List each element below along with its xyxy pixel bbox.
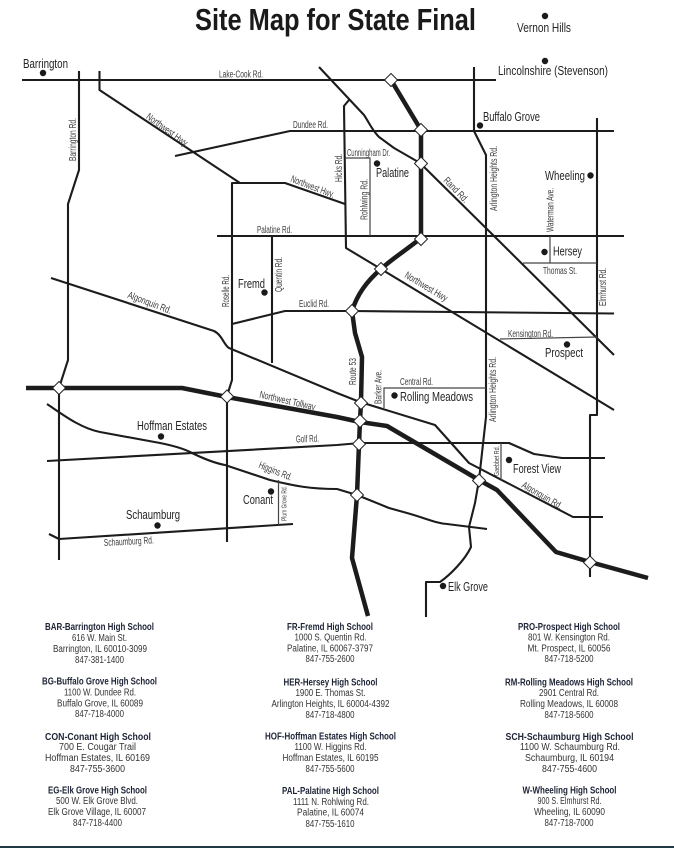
footer band	[0, 846, 674, 848]
school: Fremd: FR-Fremd High School	[287, 622, 373, 633]
road: Central Rd. and Barker Ave.	[384, 388, 486, 408]
school: Conant: CON-Conant High School	[45, 732, 151, 743]
school: Palatine: 847-755-1610	[306, 819, 355, 830]
road names: Roselle Rd.	[221, 275, 232, 307]
place names: Forest View	[513, 462, 562, 476]
place names: Prospect	[545, 346, 583, 360]
place names: Vernon Hills	[517, 21, 571, 35]
place names: Elk Grove	[448, 580, 488, 594]
road names: Euclid Rd.	[299, 299, 329, 310]
school: Wheeling	[522, 786, 617, 829]
road names: Schaumburg Rd.	[104, 535, 154, 549]
road names: Algonquin Rd.	[520, 480, 564, 512]
school: Hoffman Estates: 1100 W. Higgins Rd.	[294, 742, 366, 753]
school: Prospect	[518, 622, 620, 665]
place names: Hersey	[553, 244, 583, 258]
school: Rolling Meadows	[505, 678, 633, 721]
school: Schaumburg: 1100 W. Schaumburg Rd.	[520, 742, 620, 753]
road: Cunningham Dr. and Rohlwing Rd.	[345, 158, 370, 236]
road names: Golf Rd.	[296, 434, 319, 445]
road names: Waterman Ave.	[546, 188, 556, 232]
school: Hoffman Estates: HOF-Hoffman Estates High School	[265, 732, 396, 742]
road names: Central Rd.	[400, 377, 433, 388]
school: Rolling Meadows: Rolling Meadows, IL 60008	[520, 699, 618, 710]
road: Dundee Rd.	[175, 131, 614, 156]
place names: Buffalo Grove	[483, 110, 540, 124]
road names: Barker Ave.	[374, 370, 384, 404]
road: Algonquin Rd.	[51, 278, 603, 517]
road names: Higgins Rd.	[257, 460, 293, 483]
school: Barrington: 847-381-1400	[75, 655, 124, 666]
road: Roselle Rd.	[227, 183, 240, 542]
school: Palatine	[282, 786, 379, 830]
place names	[23, 21, 608, 594]
school: Buffalo Grove: 847-718-4000	[75, 709, 124, 720]
road: Golf Rd.	[47, 443, 605, 461]
school: Fremd: 847-755-2600	[306, 654, 355, 665]
school: Schaumburg: Schaumburg, IL 60194	[525, 753, 614, 764]
road: Hicks Rd. and Northwest Hwy east	[344, 100, 614, 410]
road names: Lake-Cook Rd.	[219, 70, 263, 80]
interchange diamonds	[52, 74, 596, 569]
school: Buffalo Grove: Buffalo Grove, IL 60089	[57, 698, 143, 710]
road names: Gaebbet Rd.	[492, 446, 501, 476]
road: Schaumburg Rd.	[49, 524, 293, 539]
road: Quentin Rd.	[271, 236, 273, 363]
road names	[68, 70, 609, 549]
school: Buffalo Grove: 1100 W. Dundee Rd.	[64, 688, 136, 698]
road names: Algonquin Rd.	[126, 290, 173, 317]
road: Euclid Rd.	[232, 311, 614, 324]
road: Route 53	[352, 80, 421, 616]
road: Lake-Cook Rd.	[22, 79, 496, 81]
road: Thomas St.	[523, 262, 597, 264]
school: Schaumburg	[506, 732, 634, 775]
school: Hersey: 847-718-4800	[306, 710, 355, 721]
school: Wheeling: W-Wheeling High School	[522, 786, 617, 796]
school: Buffalo Grove: BG-Buffalo Grove High School	[42, 676, 157, 688]
road: Barrington Rd.	[59, 71, 79, 560]
road: Gaebbet Rd.	[500, 443, 502, 480]
school: Hoffman Estates	[265, 732, 396, 775]
school: Palatine: PAL-Palatine High School	[282, 786, 379, 797]
road names: Cunningham Dr.	[347, 148, 390, 159]
school directory	[42, 622, 634, 830]
place names: Wheeling	[545, 169, 585, 183]
road names: Northwest Tollway	[258, 390, 316, 413]
school: Conant: 700 E. Cougar Trail	[59, 742, 136, 753]
road names: Hicks Rd.	[334, 154, 345, 182]
title: Site Map for State Final	[195, 2, 476, 37]
road names: Rand Rd.	[441, 175, 470, 205]
place names: Lincolnshire (Stevenson)	[498, 64, 608, 78]
school: Buffalo Grove	[42, 676, 157, 720]
place names: Conant	[243, 493, 273, 507]
school: Hoffman Estates: Hoffman Estates, IL 60195	[282, 753, 379, 764]
road: Waterman Ave.	[549, 236, 551, 263]
school: Rolling Meadows: RM-Rolling Meadows High School	[505, 678, 633, 688]
road names: Northwest Hwy.	[144, 112, 191, 150]
school: Palatine: 1111 N. Rohlwing Rd.	[293, 797, 369, 808]
school: Fremd: Palatine, IL 60067-3797	[287, 644, 373, 654]
school: Barrington	[45, 622, 154, 666]
school: Prospect: Mt. Prospect, IL 60056	[528, 644, 611, 654]
school: Elk Grove	[48, 786, 147, 829]
road names: Route 53	[348, 358, 359, 385]
school: Conant	[45, 732, 151, 775]
road: Elmhurst Rd.	[590, 118, 597, 577]
road names: Thomas St.	[543, 266, 577, 277]
school: Elk Grove: Elk Grove Village, IL 60007	[48, 807, 146, 818]
road: Plum Grove Rd.	[278, 480, 280, 525]
school: Hersey: Arlington Heights, IL 60004-4392	[272, 699, 390, 710]
school: Schaumburg: 847-755-4600	[542, 764, 597, 775]
school: Wheeling: Wheeling, IL 60090	[534, 807, 605, 818]
road: Kensington Rd.	[500, 337, 597, 339]
road: Northwest Hwy	[100, 71, 345, 204]
school: Schaumburg: SCH-Schaumburg High School	[506, 732, 634, 743]
road names: Arlington Heights Rd.	[488, 357, 499, 422]
school: Fremd: 1000 S. Quentin Rd.	[294, 632, 366, 644]
road names: Palatine Rd.	[257, 225, 292, 236]
school: Prospect: PRO-Prospect High School	[518, 622, 620, 633]
school: Wheeling: 900 S. Elmhurst Rd.	[538, 796, 602, 807]
road names: Dundee Rd.	[293, 120, 328, 131]
school: Wheeling: 847-718-7000	[544, 818, 594, 829]
map	[22, 13, 648, 617]
school location markers	[40, 13, 594, 589]
road names: Plum Grove Rd.	[280, 486, 288, 521]
school: Barrington: BAR-Barrington High School	[45, 622, 154, 633]
school: Elk Grove: 847-718-4400	[73, 818, 122, 829]
road: Higgins Rd.	[47, 404, 487, 529]
place names: Hoffman Estates	[137, 419, 207, 433]
school: Prospect: 847-718-5200	[544, 654, 594, 665]
place names: Schaumburg	[126, 508, 180, 522]
place names: Rolling Meadows	[400, 390, 473, 404]
school: Fremd	[287, 622, 373, 665]
school: Elk Grove: 500 W. Elk Grove Blvd.	[56, 796, 138, 807]
school: Rolling Meadows: 2901 Central Rd.	[539, 688, 599, 699]
school: Prospect: 801 W. Kensington Rd.	[528, 632, 610, 644]
place names: Palatine	[376, 166, 409, 180]
school: Barrington: 616 W. Main St.	[72, 633, 127, 644]
school: Rolling Meadows: 847-718-5600	[544, 710, 594, 721]
school: Hersey: 1900 E. Thomas St.	[296, 688, 366, 699]
place names: Fremd	[238, 277, 265, 291]
school: Hoffman Estates: 847-755-5600	[306, 764, 355, 775]
road: Arlington Heights Rd.	[426, 67, 486, 617]
road: Northwest Tollway	[26, 388, 648, 578]
road: Palatine Rd.	[217, 235, 624, 237]
school: Palatine: Palatine, IL 60074	[297, 808, 364, 818]
school: Hersey: HER-Hersey High School	[284, 678, 378, 688]
road names: Quentin Rd.	[274, 257, 285, 292]
road names: Barrington Rd.	[68, 118, 79, 161]
school: Barrington: Barrington, IL 60010-3099	[53, 644, 147, 655]
school: Conant: 847-755-3600	[70, 764, 125, 775]
road names: Rohlwing Rd.	[360, 179, 370, 220]
road names: Northwest Hwy.	[289, 174, 336, 201]
school: Hersey	[272, 678, 390, 721]
road names: Northwest Hwy	[402, 270, 449, 304]
road names: Arlington Heights Rd.	[489, 146, 500, 211]
road: Rand Rd.	[319, 67, 614, 355]
place names: Barrington	[23, 57, 68, 71]
school: Elk Grove: EG-Elk Grove High School	[48, 786, 147, 796]
road network	[22, 67, 648, 617]
road names: Kensington Rd.	[508, 329, 553, 340]
school: Conant: Hoffman Estates, IL 60169	[45, 753, 150, 764]
road names: Elmhurst Rd.	[598, 268, 609, 306]
